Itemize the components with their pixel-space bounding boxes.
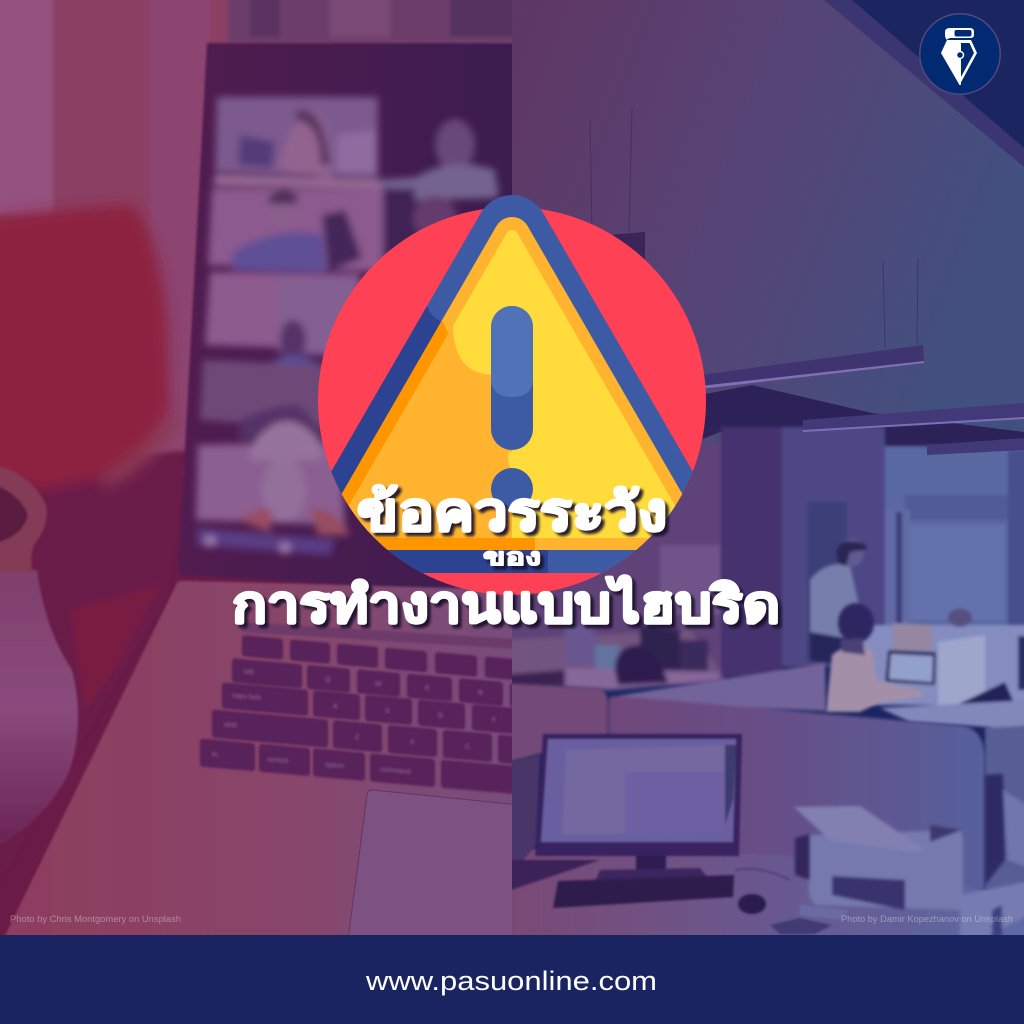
keyboard: tab bbox=[244, 668, 254, 676]
keyboard: option bbox=[325, 761, 344, 770]
trackpad bbox=[348, 790, 520, 940]
back wall, windows, shelves bbox=[500, 427, 1024, 684]
suspension wires bbox=[590, 107, 918, 348]
side monitor bbox=[505, 755, 600, 892]
keyboard: caps lock bbox=[232, 692, 262, 702]
keyboard: E bbox=[425, 685, 430, 693]
keyboard: control bbox=[267, 756, 288, 765]
lower desk bbox=[512, 848, 1024, 935]
keyboard: W bbox=[375, 681, 382, 688]
back desk with seated colleague bbox=[500, 625, 720, 690]
phones on desk bbox=[770, 905, 850, 934]
keyboard: F bbox=[492, 717, 496, 724]
front monitor bbox=[535, 734, 742, 882]
laptop body bbox=[0, 581, 530, 950]
photo credit: right: Photo by Damir Kopezhanov on Unsplash bbox=[841, 914, 1013, 924]
binders and papers bbox=[960, 774, 1024, 945]
keyboard: shift bbox=[224, 722, 237, 730]
standing man bbox=[810, 539, 866, 665]
icon: warning sign in red circle bbox=[290, 207, 706, 595]
keyboard: R bbox=[478, 690, 483, 697]
triangle outer border bbox=[335, 231, 689, 537]
printer bbox=[794, 806, 963, 910]
triangle border shadow bbox=[331, 306, 548, 573]
icon: pen nib logo bbox=[919, 13, 1001, 95]
keyboard: D bbox=[438, 712, 443, 720]
footer bar bbox=[0, 935, 1024, 1024]
title line 1: ข้อควรระวัง bbox=[357, 483, 667, 542]
corner beam bbox=[824, 0, 1024, 167]
dark ceiling recess bbox=[702, 385, 1024, 448]
keyboard: S bbox=[385, 708, 390, 715]
navy corner triangle bbox=[852, 0, 1024, 148]
laptop screen frame bbox=[178, 43, 520, 595]
keyboard: Q bbox=[325, 676, 331, 684]
ceiling light bars bbox=[700, 345, 1024, 455]
chair bbox=[0, 205, 185, 490]
far partitions and monitors bbox=[860, 609, 1024, 890]
title bbox=[232, 483, 780, 633]
exclamation mark bar bbox=[491, 306, 533, 450]
keyboard: Z bbox=[355, 734, 360, 741]
keyboard and mouse bbox=[553, 869, 790, 914]
keyboard: X bbox=[410, 739, 415, 746]
seated woman bbox=[826, 603, 925, 712]
website url: www.pasuonline.com bbox=[365, 966, 657, 996]
panel: office photo (right) bbox=[500, 0, 1024, 950]
vase bbox=[0, 463, 78, 845]
triangle yellow face bbox=[340, 236, 684, 532]
ceiling box bbox=[612, 232, 645, 260]
video call tiles on screen bbox=[196, 97, 500, 555]
photo credit: left: Photo by Chris Montgomery on Unsplash bbox=[10, 914, 181, 924]
title line 3: การทำงานแบบไฮบริด bbox=[232, 575, 780, 633]
triangle orange band bbox=[340, 235, 684, 532]
keyboard: command bbox=[380, 766, 411, 776]
title line 2: ของ bbox=[483, 544, 541, 571]
panel: home office laptop photo (left) bbox=[0, 0, 547, 950]
keyboard bbox=[199, 634, 512, 795]
keyboard: A bbox=[333, 703, 338, 711]
keyboard: fn bbox=[212, 752, 218, 759]
cubicle partitions bbox=[500, 663, 985, 890]
exclamation mark dot bbox=[491, 468, 533, 510]
keyboard: C bbox=[465, 744, 470, 751]
